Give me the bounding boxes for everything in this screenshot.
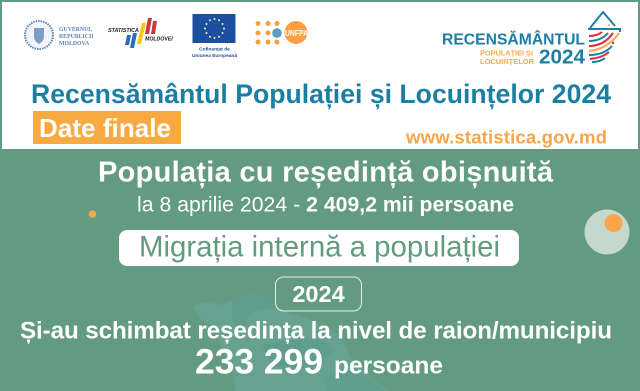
population figure: la 8 aprilie 2024 - 2 409,2 mii persoane — [137, 194, 514, 216]
year box: 2024 — [292, 281, 345, 307]
logo: European Union flag — [192, 14, 237, 59]
white header panel — [2, 2, 638, 149]
year box — [276, 277, 362, 311]
logo: Recensământul 2024: RECENSĂMÂNTUL — [442, 30, 585, 48]
heading: population: Populația cu reședință obișnuită — [98, 156, 554, 188]
website link: www.statistica.gov.md — [405, 126, 607, 148]
key figure: 233 299 — [195, 342, 323, 382]
main title: Recensământul Populației și Locuințelor 2024 — [31, 79, 611, 109]
logo: UNFPA — [256, 21, 308, 44]
decorative circle, orange — [604, 214, 622, 232]
logo: Recensământul 2024: 2024 — [539, 46, 585, 68]
logo: Guvernul Republicii Moldova: MOLDOVA — [59, 41, 90, 47]
key figure — [195, 342, 443, 382]
logo: European Union flag: Uniunea Europeană — [192, 53, 237, 59]
logo: Guvernul Republicii Moldova — [25, 21, 94, 49]
badge: Date finale: Date finale — [39, 113, 171, 143]
logo: Guvernul Republicii Moldova: REPUBLICII — [59, 34, 94, 40]
logo: Recensământul 2024 — [442, 12, 620, 68]
key figure: persoane — [334, 352, 443, 380]
logo: UNFPA: UNFPA — [285, 28, 308, 38]
decorative circle, large — [584, 210, 630, 254]
logo: Statistica Moldovei: STATISTICA — [108, 28, 139, 34]
logo: Statistica Moldovei: MOLDOVEI — [145, 36, 173, 42]
logo: Statistica Moldovei — [108, 18, 173, 48]
logo: Guvernul Republicii Moldova: GUVERNUL — [59, 27, 92, 33]
pill: internal migration: Migrația internă a populației — [139, 230, 500, 264]
text: changed residence: Și-au schimbat reședința la nivel de raion/municipiu — [20, 318, 612, 344]
logo: Recensământul 2024: LOCUINȚELOR — [480, 57, 535, 66]
icon: house and drop — [588, 12, 620, 62]
map of Moldova, faint — [193, 293, 388, 391]
logo: Recensământul 2024: POPULAȚIEI ȘI — [480, 48, 533, 58]
logo: European Union flag: Cofinanțat de — [199, 46, 230, 52]
decorative dot — [89, 210, 96, 218]
